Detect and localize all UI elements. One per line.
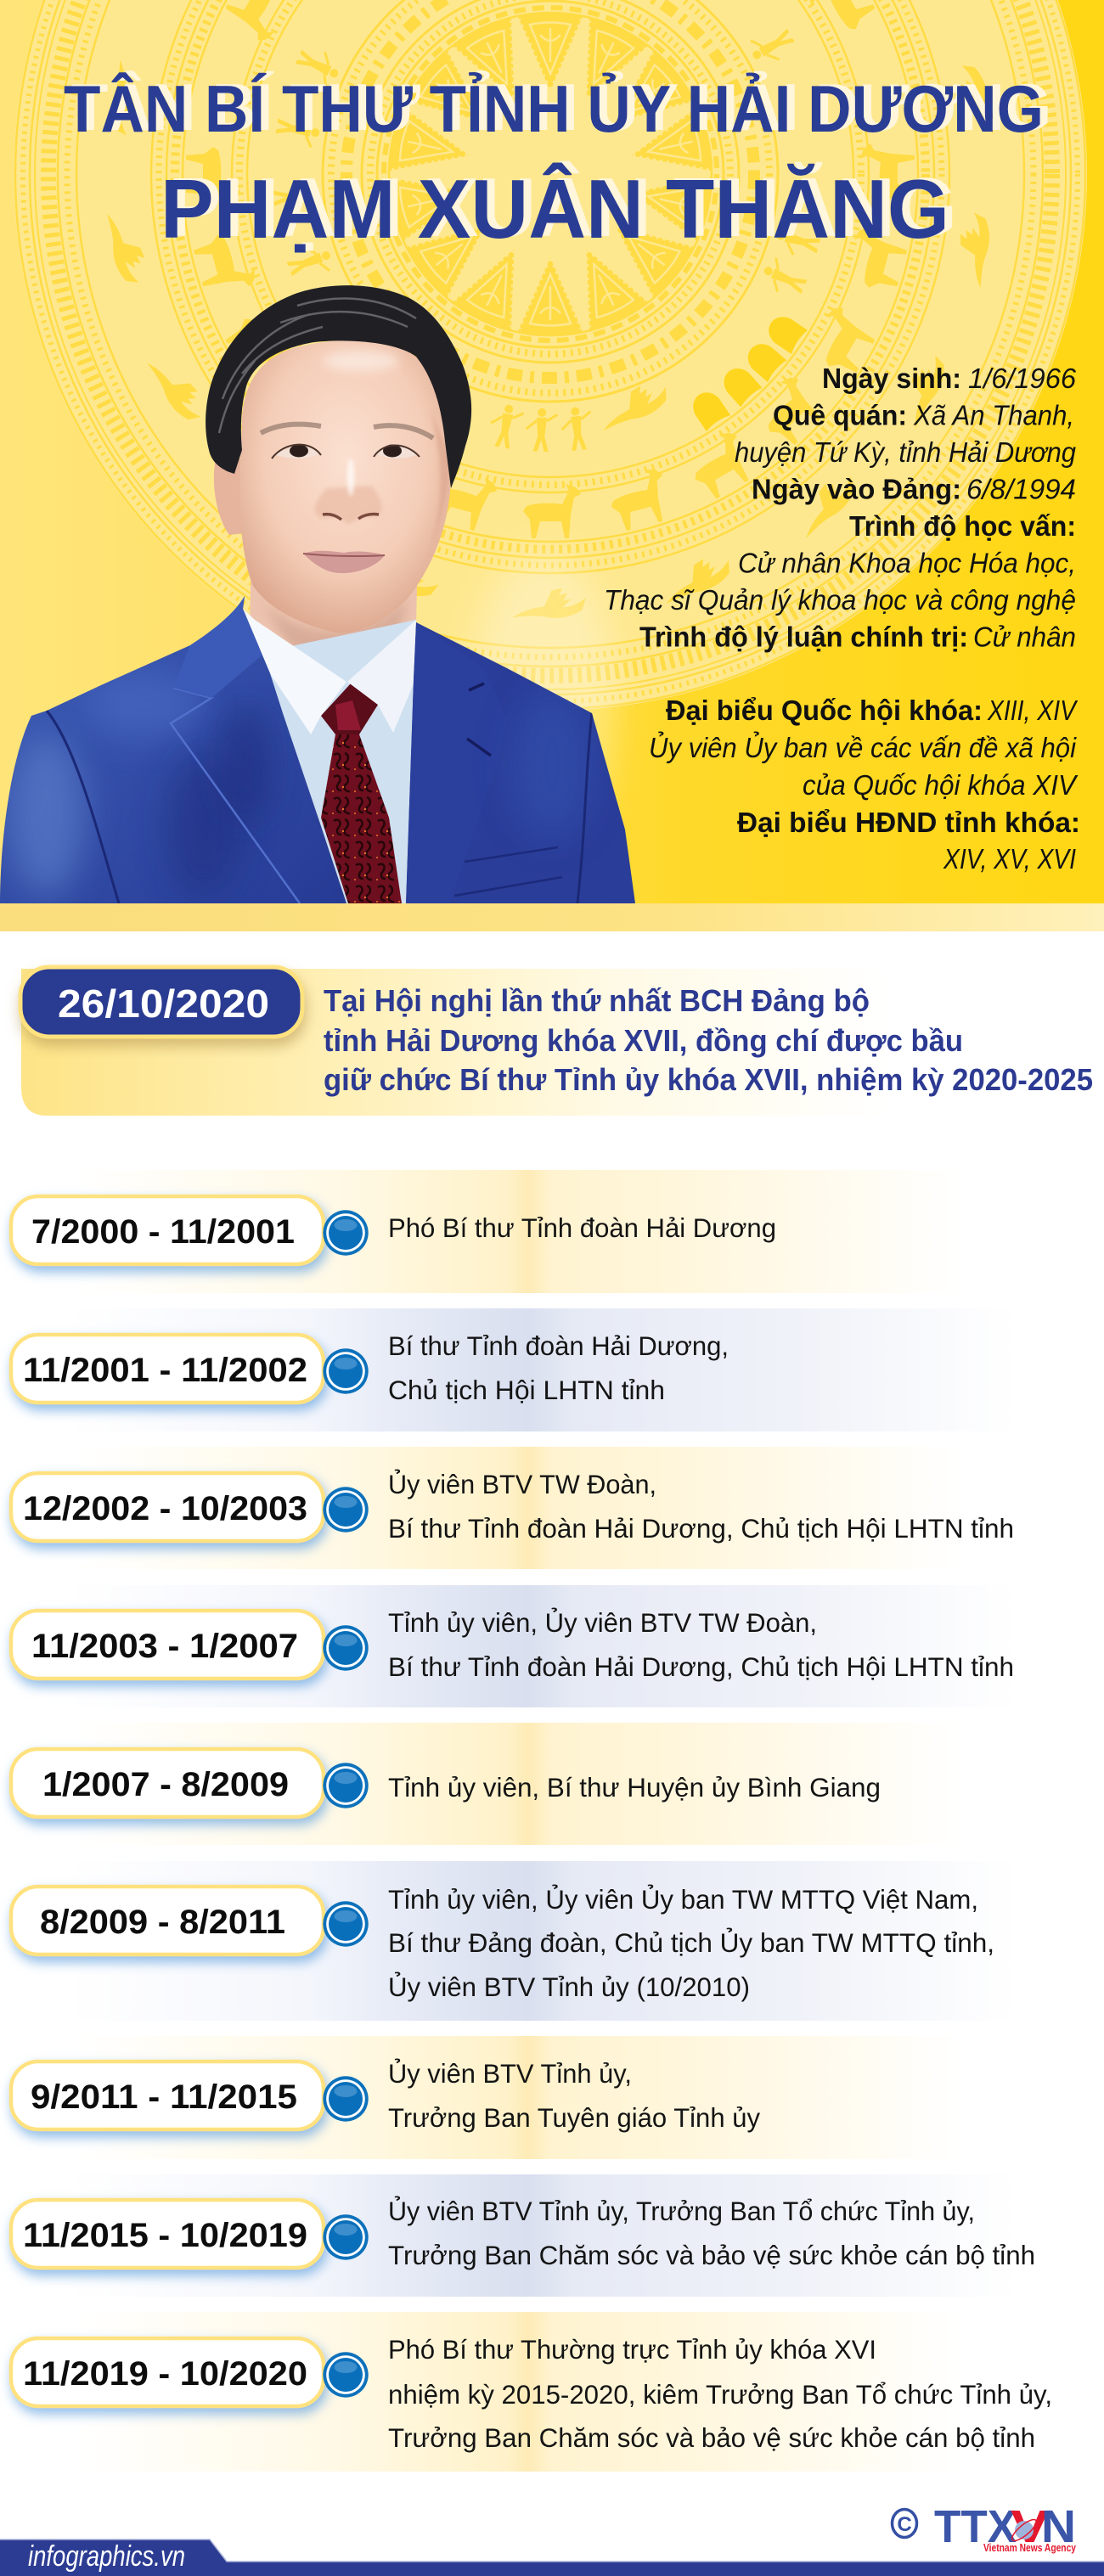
election text: Tại Hội nghị lần thứ nhất BCH Đảng bộ	[324, 983, 870, 1018]
biography details: Ngày sinh:	[822, 363, 961, 394]
timeline row 6: 8/2009 - 8/2011	[40, 1904, 285, 1941]
biography details: Đại biểu HĐND tỉnh khóa:	[737, 807, 1080, 838]
hair	[206, 285, 471, 488]
timeline row 3: 12/2002 - 10/2003	[23, 1490, 307, 1527]
timeline row 6: Ủy viên BTV Tỉnh ủy (10/2010)	[388, 1971, 750, 2002]
timeline row 8: Ủy viên BTV Tỉnh ủy, Trưởng Ban Tổ chức Tỉnh ủy,	[388, 2196, 975, 2226]
biography details: 1/6/1966	[968, 363, 1077, 394]
biography details: XIV, XV, XVI	[943, 843, 1076, 875]
election text: giữ chức Bí thư Tỉnh ủy khóa XVII, nhiệm kỳ 2020-2025	[324, 1062, 1093, 1097]
header background panel	[0, 0, 1104, 903]
ear	[214, 458, 245, 535]
timeline row 2: 11/2001 - 11/2002	[23, 1352, 307, 1389]
timeline row 6: Bí thư Đảng đoàn, Chủ tịch Ủy ban TW MTTQ tỉnh,	[388, 1927, 994, 1958]
timeline row 7: 9/2011 - 11/2015	[31, 2078, 297, 2116]
tie	[321, 734, 402, 903]
timeline row 7: Ủy viên BTV Tỉnh ủy,	[388, 2058, 632, 2089]
timeline row 7	[0, 2036, 1104, 2159]
biography details: XIII, XIV	[987, 695, 1079, 726]
timeline row 9: 11/2019 - 10/2020	[23, 2355, 307, 2393]
TTXVN logo: TTX	[934, 2501, 1017, 2552]
eyes	[276, 447, 416, 458]
timeline row 5: 1/2007 - 8/2009	[42, 1766, 289, 1803]
timeline row 5	[0, 1723, 1104, 1845]
timeline row 9	[0, 2312, 1104, 2472]
timeline row 9: nhiệm kỳ 2015-2020, kiêm Trưởng Ban Tổ chức Tỉnh ủy,	[388, 2379, 1052, 2410]
portrait photo	[0, 285, 635, 903]
timeline row 2: Chủ tịch Hội LHTN tỉnh	[388, 1375, 665, 1405]
biography details: Quê quán:	[773, 400, 907, 431]
timeline row 6	[0, 1861, 1104, 2021]
timeline row 4: Bí thư Tỉnh đoàn Hải Dương, Chủ tịch Hội LHTN tỉnh	[388, 1651, 1014, 1682]
timeline row 9: Phó Bí thư Thường trực Tỉnh ủy khóa XVI	[388, 2334, 876, 2365]
election text	[324, 983, 1093, 1097]
timeline row 8: 11/2015 - 10/2019	[23, 2217, 307, 2254]
biography details: Trình độ lý luận chính trị:	[639, 622, 968, 653]
title	[64, 71, 1044, 256]
bronze drum motif	[14, 0, 1087, 711]
timeline row 2	[0, 1308, 1104, 1431]
face	[239, 340, 451, 633]
timeline row 5: Tỉnh ủy viên, Bí thư Huyện ủy Bình Giang	[388, 1772, 881, 1803]
timeline row 2: Bí thư Tỉnh đoàn Hải Dương,	[388, 1330, 729, 1361]
timeline row 9: Trưởng Ban Chăm sóc và bảo vệ sức khỏe cán bộ tỉnh	[388, 2422, 1035, 2453]
election text: tỉnh Hải Dương khóa XVII, đồng chí được bầu	[324, 1023, 963, 1058]
timeline row 4: 11/2003 - 1/2007	[31, 1628, 298, 1665]
timeline row 1: 7/2000 - 11/2001	[31, 1213, 295, 1251]
collar	[243, 609, 346, 734]
TTXVN logo: N	[1041, 2501, 1076, 2552]
date pill	[20, 967, 302, 1037]
shirt	[255, 620, 416, 903]
TTXVN logo	[892, 2501, 1077, 2554]
panel: election highlight	[20, 967, 1104, 1116]
biography details: Cử nhân	[973, 622, 1076, 653]
biography details: Xã An Thanh,	[913, 400, 1074, 431]
eyebrows	[261, 425, 433, 438]
biography details: Ngày vào Đảng:	[752, 474, 961, 505]
jacket	[0, 596, 346, 903]
biography details: Trình độ học vấn:	[849, 510, 1076, 542]
timeline row 3	[0, 1447, 1104, 1569]
date pill: 26/10/2020	[58, 981, 269, 1026]
timeline row 3: Bí thư Tỉnh đoàn Hải Dương, Chủ tịch Hội LHTN tỉnh	[388, 1513, 1014, 1544]
biography details	[604, 363, 1080, 875]
neck	[250, 552, 418, 683]
timeline row 4: Tỉnh ủy viên, Ủy viên BTV TW Đoàn,	[388, 1607, 817, 1638]
footer bar: infographics.vn	[28, 2540, 185, 2573]
TTXVN logo: C	[897, 2513, 912, 2536]
biography details: của Quốc hội khóa XIV	[803, 769, 1079, 801]
timeline row 3: Ủy viên BTV TW Đoàn,	[388, 1469, 656, 1499]
timeline row 8: Trưởng Ban Chăm sóc và bảo vệ sức khỏe cán bộ tỉnh	[388, 2240, 1035, 2270]
title: PHẠM XUÂN THĂNG	[161, 162, 949, 256]
header bottom strip	[0, 903, 1104, 931]
biography details: Thạc sĩ Quản lý khoa học và công nghệ	[604, 584, 1076, 616]
footer bar	[0, 2539, 1104, 2576]
timeline row 8	[0, 2174, 1104, 2297]
nose	[315, 486, 382, 525]
timeline row 1	[0, 1170, 1104, 1293]
TTXVN logo: V	[1011, 2501, 1049, 2552]
biography details: Đại biểu Quốc hội khóa:	[666, 695, 983, 726]
biography details: Ủy viên Ủy ban về các vấn đề xã hội	[649, 731, 1078, 763]
timeline row 7: Trưởng Ban Tuyên giáo Tỉnh ủy	[388, 2102, 760, 2133]
timeline row 4	[0, 1585, 1104, 1707]
biography details: Cử nhân Khoa học Hóa học,	[738, 547, 1076, 579]
biography details: 6/8/1994	[966, 474, 1076, 505]
timeline row 6: Tỉnh ủy viên, Ủy viên Ủy ban TW MTTQ Việt Nam,	[388, 1884, 978, 1915]
TTXVN logo: Vietnam News Agency	[983, 2541, 1077, 2554]
mouth	[303, 551, 385, 573]
soft glow behind portrait	[471, 552, 616, 858]
biography details: huyện Tứ Kỳ, tỉnh Hải Dương	[735, 436, 1077, 468]
timeline row 1: Phó Bí thư Tỉnh đoàn Hải Dương	[388, 1212, 776, 1243]
